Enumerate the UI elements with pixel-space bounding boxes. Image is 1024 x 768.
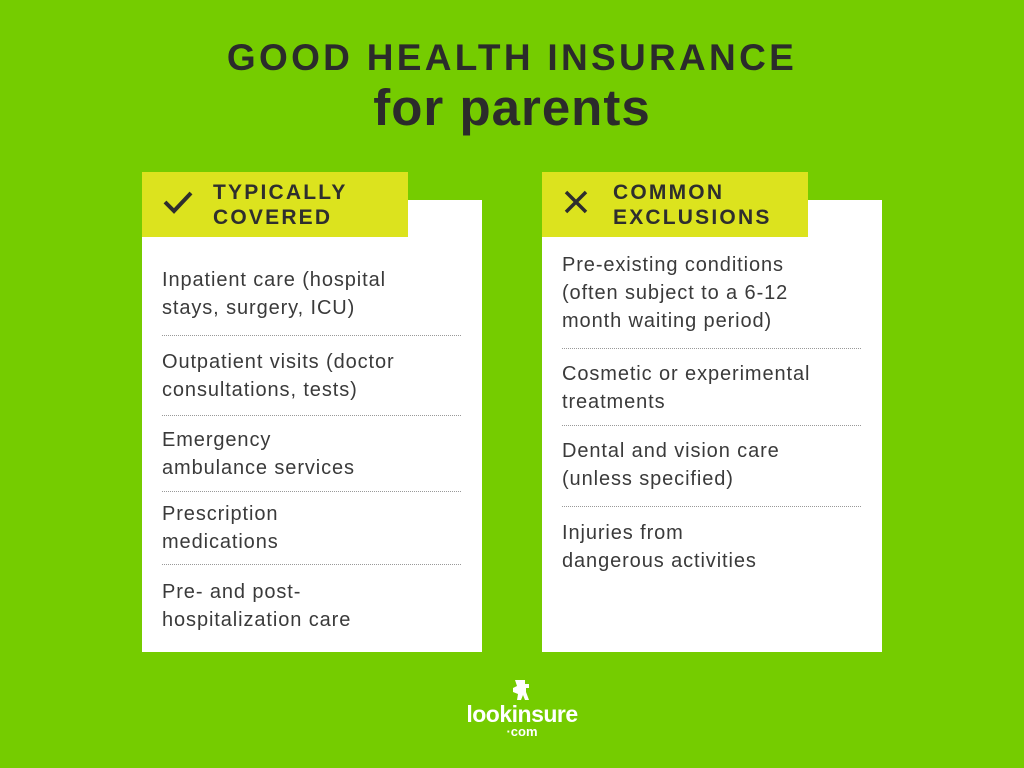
tag: common exclusions: COMMON [613,181,724,204]
tag: common exclusions: EXCLUSIONS [613,206,772,229]
covered items: ambulance services [162,457,355,479]
covered items: consultations, tests) [162,379,358,401]
tag: typically covered [142,172,408,237]
panel: common exclusions [542,200,882,652]
exclusion items: (often subject to a 6-12 [562,282,788,304]
covered items: Outpatient visits (doctor [162,351,395,373]
covered items: Emergency [162,429,271,451]
exclusion items [562,254,861,572]
exclusion items: dangerous activities [562,550,757,572]
tag: typically covered: COVERED [213,206,332,229]
panel: typically covered [142,200,482,652]
tag: typically covered: TYPICALLY [213,181,348,204]
covered items [162,269,461,631]
exclusion items: Cosmetic or experimental [562,363,810,385]
tag: common exclusions [542,172,808,237]
exclusion items: Pre-existing conditions [562,254,784,276]
exclusion items: Dental and vision care [562,440,780,462]
title: for parents [373,79,651,136]
exclusion items: month waiting period) [562,310,772,332]
logo: lookinsure [466,701,578,727]
covered items: hospitalization care [162,609,351,631]
icon: mascot [513,680,529,700]
covered items: stays, surgery, ICU) [162,297,355,319]
covered items: Prescription [162,503,278,525]
exclusion items: Injuries from [562,522,684,544]
icon: cross [564,190,588,214]
icon: check [164,192,192,214]
exclusion items: treatments [562,391,665,413]
covered items: Inpatient care (hospital [162,269,386,291]
logo [466,680,578,739]
exclusion items: (unless specified) [562,468,734,490]
title [227,37,797,136]
covered items: medications [162,531,279,553]
covered items: Pre- and post- [162,581,301,603]
title: GOOD HEALTH INSURANCE [227,37,797,78]
logo: ·com [506,724,538,739]
